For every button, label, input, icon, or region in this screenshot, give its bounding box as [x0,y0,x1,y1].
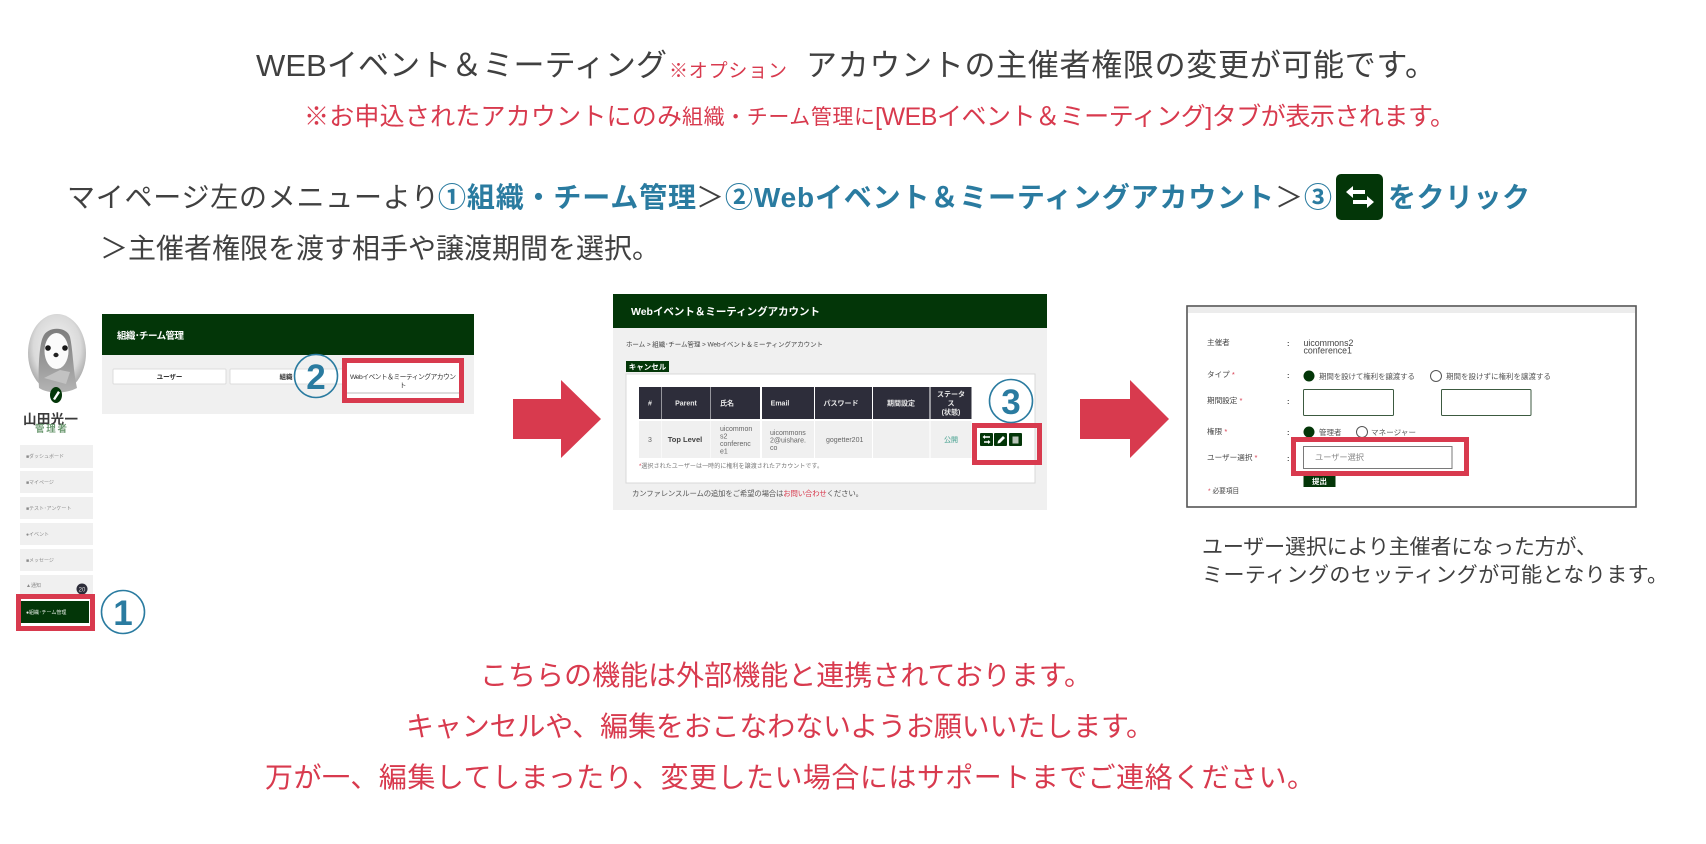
arrow [1080,380,1169,458]
table row: Top Level [668,435,702,444]
cancel button: キャンセル [629,362,667,372]
step marker 2 [294,354,338,398]
warning message: こちらの機能は外部機能と連携されております。 [480,660,1092,691]
menu items: ■テスト･アンケート [26,505,71,512]
table row: co [770,445,778,452]
warning message: 万が一、編集してしまったり、変更したい場合にはサポートまでご連絡ください。 [265,762,1315,793]
user role: 管理者 [35,423,67,435]
table row: gogetter201 [826,437,863,444]
role options [1304,426,1416,438]
period inputs [1304,390,1531,416]
option note: ※オプション [669,60,787,82]
icon: user avatar [28,314,86,403]
form labels: 期間設定 * [1207,396,1242,405]
table header: Parent [675,400,698,408]
menu items: ▲通知 [26,582,41,589]
form labels: 主催者 [1207,337,1230,347]
table header: 氏名 [720,398,734,408]
menu items: ●イベント [26,532,49,538]
form labels: ユーザー選択 * [1207,452,1258,462]
role options: 管理者 [1319,427,1342,437]
table header: Email [771,400,789,408]
table header: ス [948,400,954,408]
title: WEBイベント＆ミーティング [256,48,667,83]
tab: users: ユーザー [157,372,182,381]
step marker 2: 2 [306,358,326,397]
organizer value [1304,338,1353,356]
title continuation: アカウントの主催者権限の変更が可能です。 [806,48,1436,83]
tab: web event highlighted [344,360,462,400]
panel header [102,314,474,355]
caption [1202,536,1668,587]
table card [626,374,1035,483]
panel: organization and team management [102,314,474,414]
menu items: 20 [79,588,86,594]
instruction line 1: マイページ左のメニューより [67,182,439,213]
panel: web event meeting accounts [613,294,1047,510]
caption: ユーザー選択により主催者になった方が、 [1202,536,1597,559]
form labels: * 必要項目 [1208,486,1239,495]
menu items: ■メッセージ [26,558,54,564]
form labels: 権限 * [1207,426,1227,436]
table header: パスワード [824,400,858,408]
instruction line 1: ＞ [1275,182,1303,213]
red note [304,103,1455,131]
caption: ミーティングのセッティングが可能となります。 [1202,564,1668,587]
warning message: キャンセルや、編集をおこなわないようお願いいたします。 [406,711,1154,742]
red note: 組織・チーム管理に [682,106,875,129]
table header: ステータ [937,390,965,398]
arrow [513,380,601,458]
form labels: : [1287,428,1290,437]
user select with highlight: ユーザー選択 [1315,452,1364,462]
active menu item with highlight: ●組織･チーム管理 [26,609,66,616]
form labels: : [1287,397,1290,406]
instruction line 1: ②Webイベント＆ミーティングアカウント [725,181,1274,213]
table header: (状態) [942,408,960,416]
table header [639,387,972,419]
form labels: タイプ * [1207,370,1235,379]
role options: マネージャー [1371,428,1416,437]
tab: web event highlighted: ト [400,382,406,390]
icon: transfer button [1336,174,1383,220]
form labels: : [1287,454,1290,463]
table row: uicommon [720,426,752,433]
panel header: 組織･チーム管理 [117,330,184,342]
submit button [1304,474,1336,487]
form labels [1207,337,1290,495]
panel: organizer form [1187,306,1636,507]
menu items [20,445,93,595]
menu items: ■マイページ [26,480,54,486]
breadcrumb: ホーム > 組織･チーム管理 > Webイベント＆ミーティングアカウント [626,340,823,348]
table row: conferenc [720,441,751,448]
type options [1304,370,1551,382]
red note: ※お申込されたアカウントにのみ [304,103,682,131]
warning message [265,660,1315,793]
table row: 2@uishare. [770,438,806,444]
instruction line 1: ③ [1304,182,1332,213]
submit button: 提出 [1312,476,1327,486]
panel: sidebar screenshot [18,314,144,634]
form labels: : [1287,371,1290,380]
step marker 3 [990,380,1032,422]
title [256,48,1436,83]
footer note: カンファレンスルームの追加をご希望の場合はお問い合わせください。 [632,489,863,498]
table header: # [648,400,652,408]
form labels: : [1287,339,1290,348]
active menu item with highlight [18,596,92,628]
tab: users [113,369,226,384]
user select with highlight [1294,440,1466,474]
instruction line 1: をクリック [1388,182,1530,213]
panel header: Webイベント＆ミーティングアカウント [631,305,820,318]
table row: e1 [720,448,728,456]
table row: uicommons [770,430,806,437]
red note: [WEBイベント＆ミーティング]タブが表示されます。 [875,103,1455,131]
step marker 1: 1 [113,594,133,633]
type options: 期間を設けずに権利を譲渡する [1446,371,1551,381]
menu items: ■ダッシュボード [26,453,64,460]
type options: 期間を設けて権利を譲渡する [1319,371,1415,381]
panel header [613,294,1047,328]
tab: web event highlighted: Webイベント＆ミーティングアカウン [350,372,456,381]
instruction line 1: ①組織・チーム管理 [438,182,696,213]
instruction line 1 [67,174,1530,220]
tab: organization [230,369,343,384]
table note: *選択されたユーザーは一時的に権利を譲渡されたアカウントです。 [639,462,823,470]
step marker 3: 3 [1001,383,1021,422]
table row: 3 [648,437,652,444]
table header: 期間設定 [887,398,915,408]
tab: organization: 組織 [280,372,293,381]
action icons with highlight [974,426,1040,462]
table row: 公開 [944,436,958,444]
step marker 1 [102,590,144,634]
instruction line 1: ＞ [696,182,724,213]
table row [639,421,972,458]
organizer value: conference1 [1304,346,1352,356]
table row: s2 [720,434,728,440]
user name: 山田光一 [23,411,78,427]
instruction line 2: ＞主催者権限を渡す相手や譲渡期間を選択。 [100,233,660,264]
organizer value: uicommons2 [1304,338,1353,348]
